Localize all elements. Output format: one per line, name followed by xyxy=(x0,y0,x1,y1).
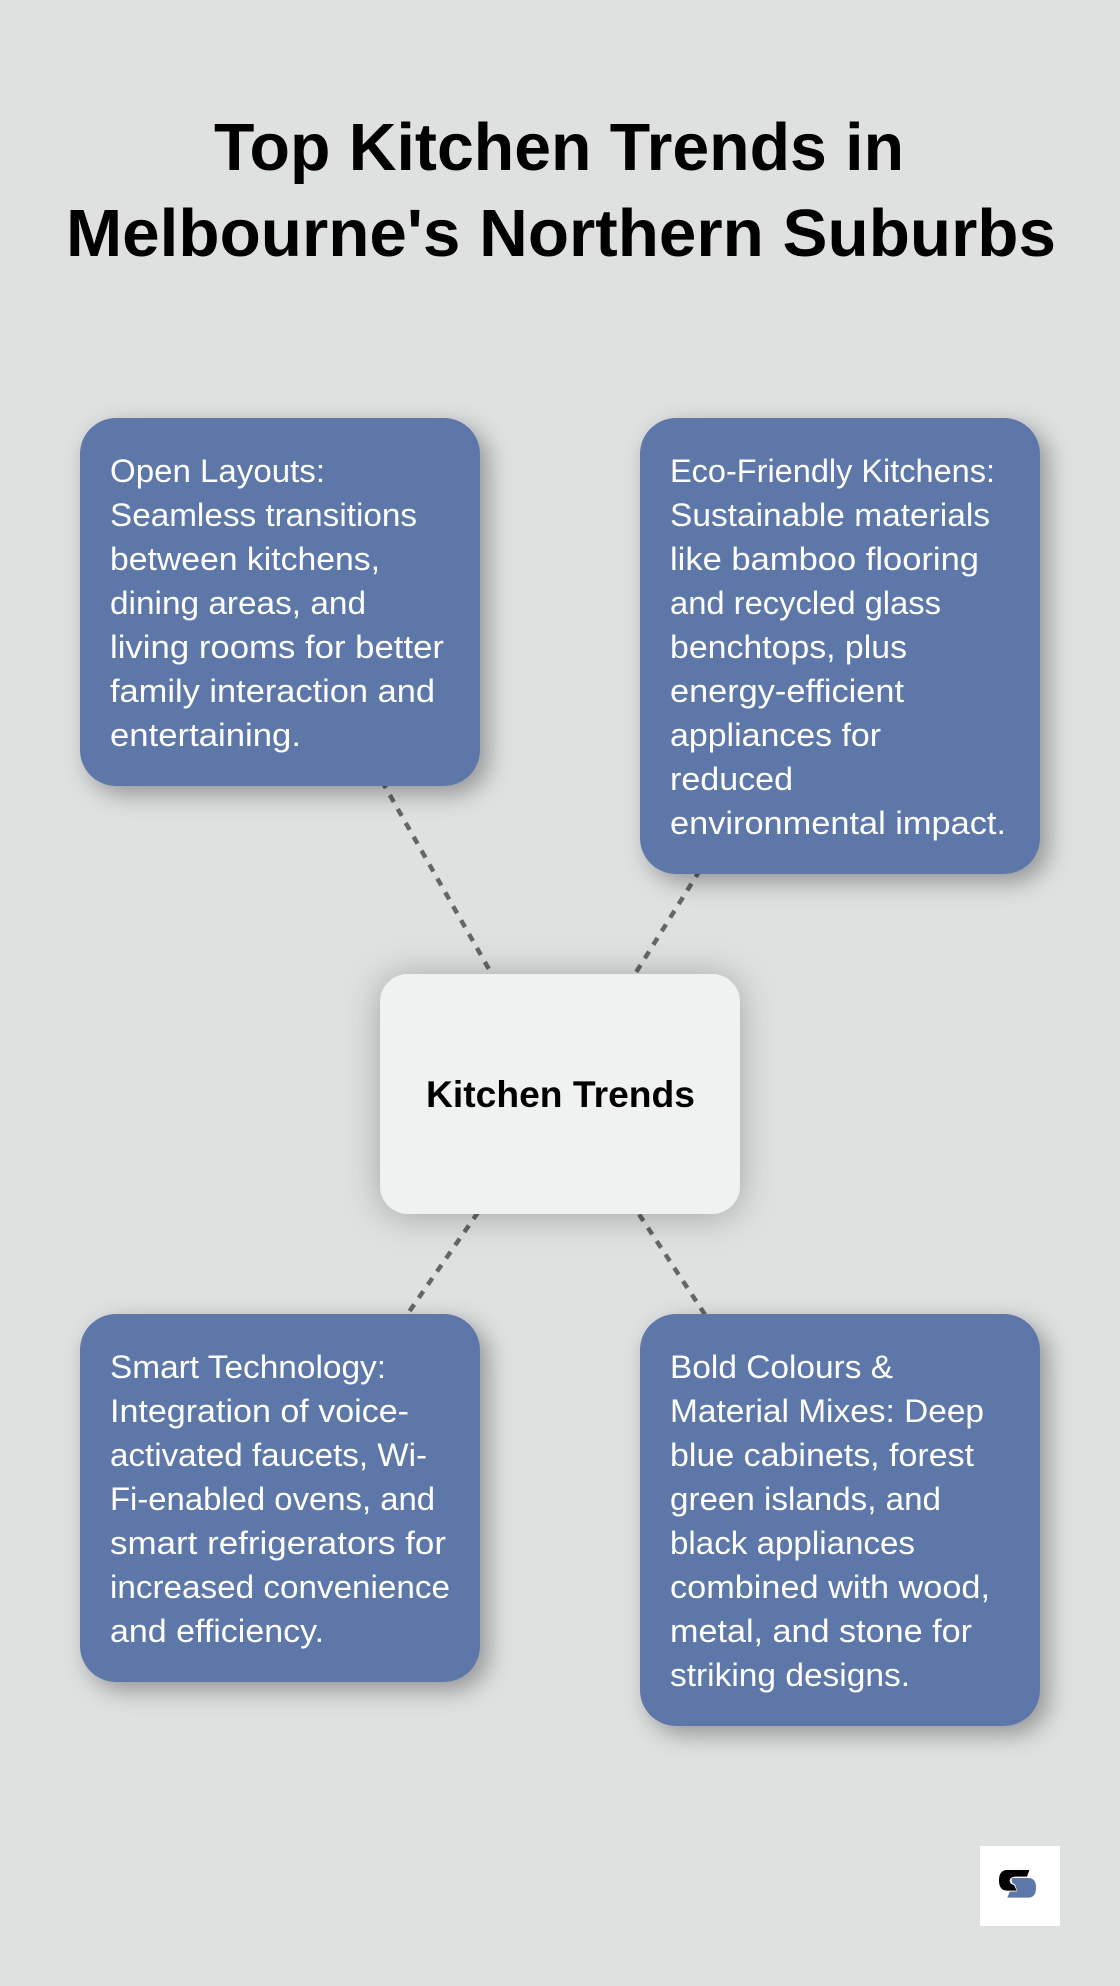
text: bold colours description: Material Mixes: Deep xyxy=(670,1393,984,1429)
text: smart technology description: and efficiency. xyxy=(110,1613,324,1649)
connector: center to smart technology xyxy=(280,1094,560,1498)
text: bold colours description: Bold Colours & xyxy=(670,1349,893,1385)
text: bold colours description: combined with wood, xyxy=(670,1569,990,1605)
text: eco-friendly kitchens description: like bamboo flooring xyxy=(670,541,979,577)
text: open layouts description: between kitchens, xyxy=(110,541,380,577)
text: eco-friendly kitchens description: and recycled glass xyxy=(670,585,941,621)
text: bold colours description: striking designs. xyxy=(670,1657,910,1693)
text: bold colours description: blue cabinets, forest xyxy=(670,1437,974,1473)
text: smart technology description: smart refrigerators for xyxy=(110,1525,446,1561)
text: eco-friendly kitchens description: reduced xyxy=(670,761,793,797)
panel: smart technology xyxy=(80,1314,480,1682)
connector: center to eco-friendly kitchens xyxy=(560,646,840,1094)
title xyxy=(66,110,1056,271)
text: bold colours description xyxy=(670,1349,990,1693)
panel: open layouts xyxy=(80,418,480,786)
text: open layouts description: family interaction and xyxy=(110,673,435,709)
text: eco-friendly kitchens description: environmental impact. xyxy=(670,805,1006,841)
text: eco-friendly kitchens description: Eco-Friendly Kitchens: xyxy=(670,453,995,489)
panel: kitchen trends center xyxy=(380,974,740,1214)
text: open layouts description: Open Layouts: xyxy=(110,453,325,489)
connector: center to open layouts xyxy=(280,602,560,1094)
text: open layouts description xyxy=(110,453,444,753)
text: eco-friendly kitchens description: benchtops, plus xyxy=(670,629,907,665)
text: eco-friendly kitchens description: Sustainable materials xyxy=(670,497,990,533)
icon: logo badge xyxy=(980,1846,1060,1926)
text: open layouts description: living rooms for better xyxy=(110,629,444,665)
connector: center to bold colours xyxy=(560,1094,840,1520)
text: smart technology description: Fi-enabled ovens, and xyxy=(110,1481,435,1517)
text: smart technology description: Integration of voice- xyxy=(110,1393,409,1429)
text: open layouts description: entertaining. xyxy=(110,717,301,753)
text: open layouts description: dining areas, and xyxy=(110,585,366,621)
panel: bold colours and material mixes xyxy=(640,1314,1040,1726)
text: smart technology description: activated faucets, Wi- xyxy=(110,1437,427,1473)
panel: eco-friendly kitchens xyxy=(640,418,1040,874)
text: smart technology description xyxy=(110,1349,450,1649)
text: eco-friendly kitchens description: appliances for xyxy=(670,717,881,753)
text: open layouts description: Seamless transitions xyxy=(110,497,417,533)
text: smart technology description: Smart Technology: xyxy=(110,1349,386,1385)
text: bold colours description: black appliances xyxy=(670,1525,915,1561)
text: bold colours description: green islands, and xyxy=(670,1481,941,1517)
text: eco-friendly kitchens description xyxy=(670,453,1006,841)
text: eco-friendly kitchens description: energy-efficient xyxy=(670,673,904,709)
text: smart technology description: increased convenience xyxy=(110,1569,450,1605)
center label: Kitchen Trends xyxy=(426,1074,695,1115)
title: Top Kitchen Trends in xyxy=(214,110,904,185)
text: bold colours description: metal, and stone for xyxy=(670,1613,972,1649)
title: Melbourne's Northern Suburbs xyxy=(66,196,1056,271)
